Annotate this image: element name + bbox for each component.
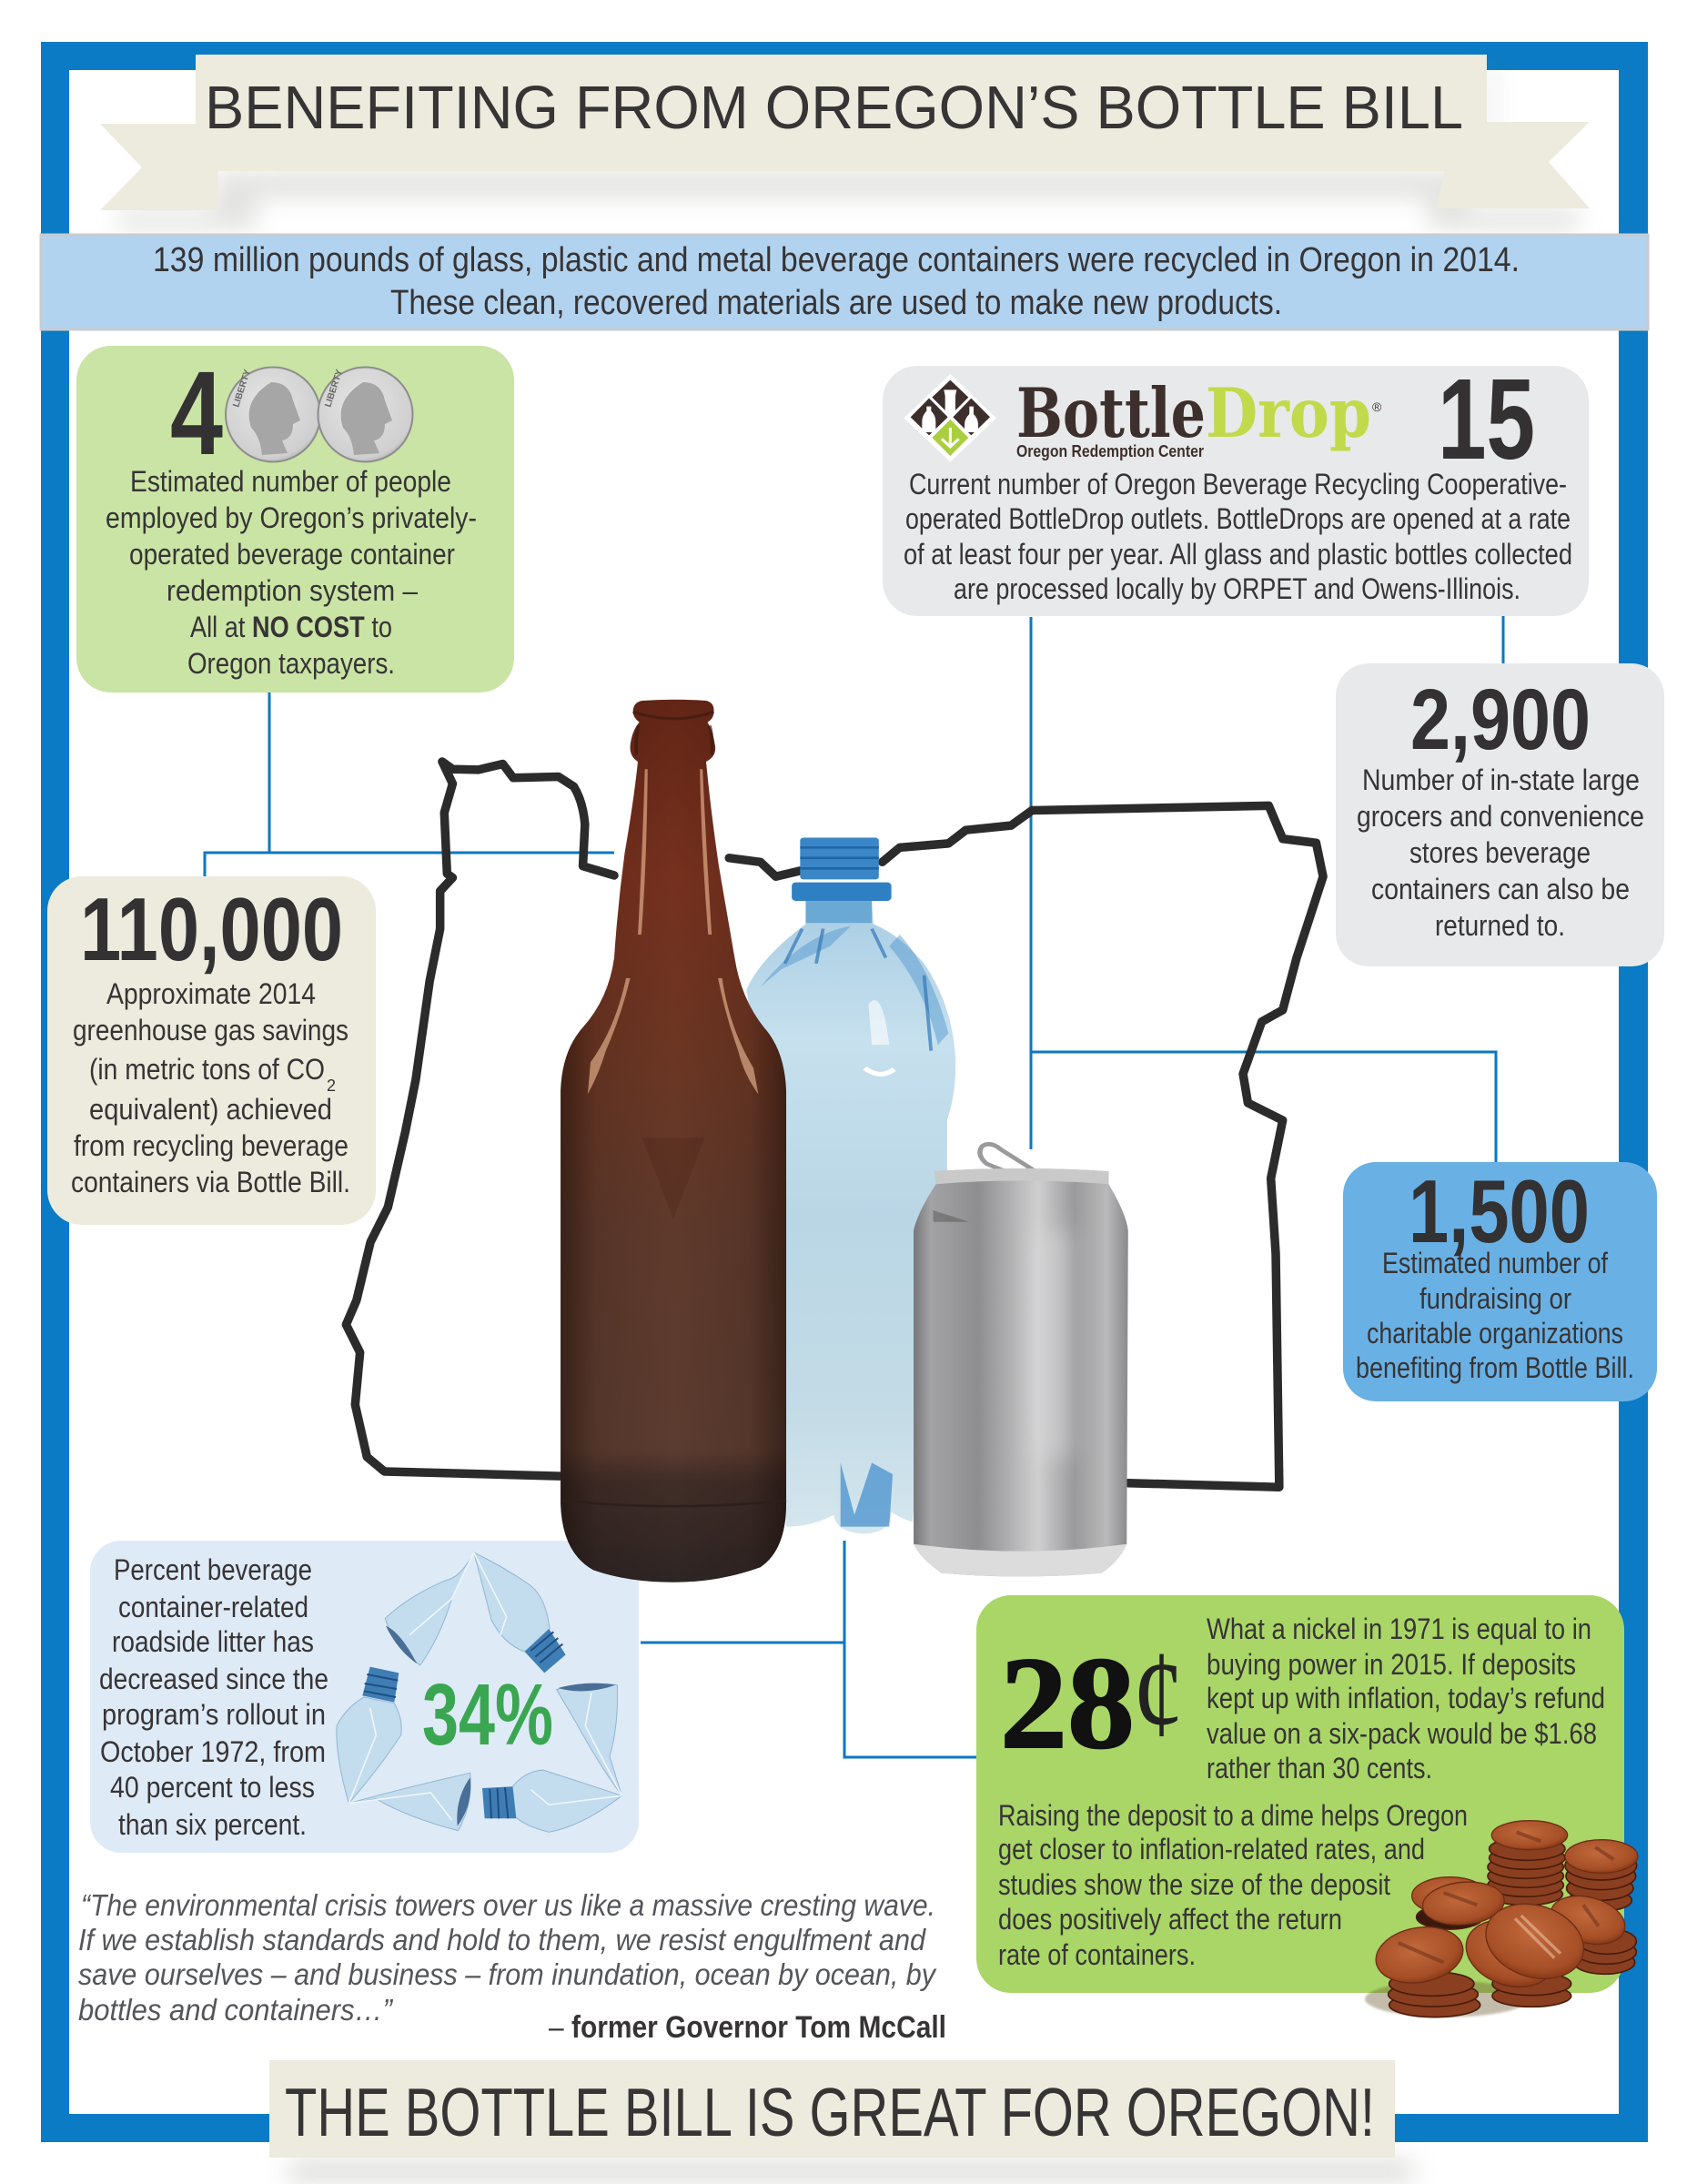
big figure 28 cents: [1000, 1624, 1184, 1776]
panel: BottleDrop 15: [883, 355, 1589, 616]
panel text: [904, 468, 1572, 605]
panel text: decreased since the: [99, 1663, 328, 1695]
panel text: 2: [327, 1077, 336, 1095]
icon: BottleDrop diamond logo: [904, 374, 996, 462]
big number 15: 15: [1438, 355, 1535, 483]
panel background: [883, 366, 1589, 616]
title text: BENEFITING FROM OREGON’S BOTTLE BILL: [205, 74, 1463, 142]
panel text: operated beverage container: [129, 538, 455, 571]
panel text: Percent beverage: [114, 1553, 312, 1586]
big number: 110,000: [80, 879, 343, 979]
panel background: [90, 1541, 639, 1853]
panel text: October 1972, from: [100, 1735, 326, 1768]
panel text: Estimated number of: [1382, 1247, 1608, 1279]
brown glass bottle: [561, 700, 786, 1582]
panel text: operated BottleDrop outlets. BottleDrops are opened at a rate: [905, 502, 1571, 535]
panel: 1,500 organizations: [1343, 1161, 1657, 1401]
icon: first dime as zero: LIBERTY: [231, 369, 253, 409]
aluminum can: [914, 1144, 1128, 1576]
panel text: containers via Bottle Bill.: [71, 1166, 350, 1198]
panel text: returned to.: [1435, 909, 1565, 942]
panel text: grocers and convenience: [1357, 800, 1644, 833]
intro line 2: These clean, recovered materials are used to make new products.: [390, 284, 1282, 322]
title ribbon: [100, 55, 1590, 229]
panel text: fundraising or: [1419, 1282, 1571, 1315]
panel text: 40 percent to less: [110, 1771, 315, 1804]
panel text: program’s rollout in: [102, 1698, 326, 1731]
icon: second dime as zero: LIBERTY: [323, 369, 345, 409]
logo wordmark: ®: [1372, 399, 1382, 414]
panel text: Approximate 2014: [106, 977, 316, 1010]
Oregon state outline: [346, 762, 1323, 1487]
lower paragraph: get closer to inflation-related rates, and: [998, 1833, 1425, 1866]
closing banner: [269, 2060, 1413, 2182]
intro line 1: 139 million pounds of glass, plastic and metal beverage containers were recycled in Oregon in 2014.: [153, 241, 1520, 279]
big digit 4: 4: [170, 346, 223, 480]
big number: 1,500: [1409, 1161, 1590, 1261]
big figure 28 cents: ¢: [1133, 1624, 1184, 1764]
pull quote: bottles and containers…”: [78, 1993, 394, 2027]
logo wordmark: Drop: [1206, 373, 1371, 453]
panel text: redemption system –: [167, 574, 418, 607]
panel text: charitable organizations: [1367, 1317, 1623, 1350]
panel text: Oregon taxpayers.: [187, 647, 395, 680]
lower paragraph: studies show the size of the deposit: [998, 1868, 1390, 1901]
lower paragraph: rate of containers.: [998, 1938, 1196, 1971]
panel text: All at NO COST to: [190, 611, 392, 643]
panel text: containers can also be: [1371, 873, 1630, 905]
pull quote: If we establish standards and hold to them, we resist engulfment and: [78, 1923, 927, 1956]
lower paragraph: Raising the deposit to a dime helps Oregon: [998, 1799, 1468, 1832]
banner text: THE BOTTLE BILL IS GREAT FOR OREGON!: [285, 2074, 1375, 2150]
panel background: [976, 1595, 1624, 1993]
panel text: Current number of Oregon Beverage Recycling Cooperative-: [909, 468, 1567, 500]
upper paragraph: rather than 30 cents.: [1207, 1752, 1432, 1785]
panel text: (in metric tons of CO: [89, 1053, 325, 1086]
lower paragraph: [998, 1799, 1468, 1971]
panel: 34% litter: [90, 1541, 639, 1853]
panel text: Estimated number of people: [130, 465, 451, 498]
panel: 2,900 stores: [1336, 663, 1664, 966]
panel text: [1356, 1247, 1634, 1384]
upper paragraph: [1207, 1613, 1605, 1785]
logo wordmark: Bottle: [1016, 373, 1206, 453]
banner background: [269, 2060, 1395, 2158]
icon: first dime as zero: [226, 368, 320, 462]
lower paragraph: does positively affect the return: [998, 1903, 1342, 1936]
panel text: [1357, 763, 1644, 942]
upper paragraph: buying power in 2015. If deposits: [1207, 1648, 1576, 1681]
panel background: [47, 876, 376, 1225]
panel text: roadside litter has: [112, 1625, 314, 1658]
big number: 2,900: [1410, 672, 1591, 768]
panel text: stores beverage: [1409, 836, 1591, 869]
upper paragraph: kept up with inflation, today’s refund: [1207, 1682, 1605, 1714]
panel text: greenhouse gas savings: [73, 1014, 349, 1046]
panel text: are processed locally by ORPET and Owens-Illinois.: [954, 572, 1520, 605]
panel text: equivalent) achieved: [89, 1093, 332, 1126]
panel: 28 cents: [976, 1595, 1638, 2017]
ribbon left tail: [100, 124, 218, 210]
icon: recycling triangle of crushed bottles: [337, 1552, 621, 1832]
icon: pile of pennies: [1365, 1821, 1638, 2017]
plastic bottle: [746, 837, 955, 1533]
panel background: [1343, 1162, 1657, 1401]
ribbon main: [196, 55, 1487, 171]
panel: 400 employed: [76, 346, 514, 693]
icon: second dime as zero: [318, 368, 413, 462]
pull quote: “The environmental crisis towers over us like a massive cresting wave.: [81, 1888, 935, 1922]
connector lines: [205, 615, 1503, 1757]
ribbon shadows: [118, 64, 1579, 229]
upper paragraph: value on a six-pack would be $1.68: [1207, 1717, 1597, 1750]
34 percent figure: 34%: [422, 1666, 553, 1764]
upper paragraph: What a nickel in 1971 is equal to in: [1207, 1613, 1591, 1645]
band background: [41, 235, 1648, 329]
panel text: Number of in-state large: [1362, 763, 1640, 796]
intro band: [41, 235, 1648, 329]
quote attribution: – former Governor Tom McCall: [549, 2010, 946, 2045]
logo wordmark: Oregon Redemption Center: [1016, 442, 1204, 460]
pull quote: save ourselves – and business – from inundation, ocean by ocean, by: [78, 1957, 937, 1991]
panel: 110,000 greenhouse gas: [47, 876, 376, 1225]
big figure 28 cents: 28: [1000, 1631, 1135, 1776]
panel text: employed by Oregon’s privately-: [106, 501, 477, 534]
panel text: of at least four per year. All glass and plastic bottles collected: [904, 538, 1572, 571]
panel text: than six percent.: [118, 1808, 307, 1841]
ribbon right tail: [1436, 122, 1590, 208]
panel text: [71, 977, 350, 1198]
panel text: from recycling beverage: [74, 1129, 349, 1162]
panel text: container-related: [118, 1591, 308, 1623]
panel text: benefiting from Bottle Bill.: [1356, 1351, 1634, 1384]
panel background: [1336, 663, 1664, 966]
panel background: [76, 346, 514, 693]
panel text: [106, 465, 477, 680]
logo wordmark: [1016, 373, 1382, 460]
pull quote: [78, 1888, 937, 2027]
banner shadow: [288, 2160, 1413, 2182]
panel text: [99, 1553, 328, 1841]
